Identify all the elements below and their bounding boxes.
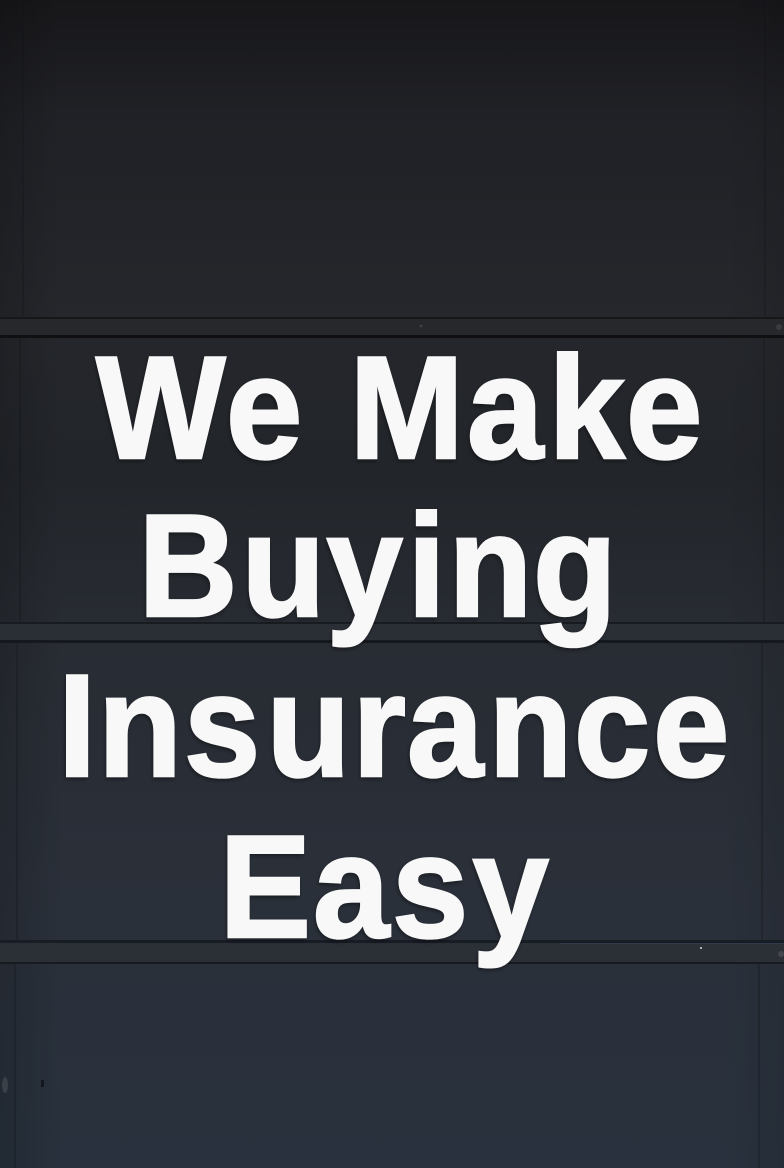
line: Easy: Easy [219, 806, 549, 969]
horizontal batten 1 [0, 317, 784, 338]
line: Insurance: Insurance [58, 645, 729, 808]
headline text [58, 327, 729, 969]
small wall marks [2, 1077, 44, 1093]
horizontal batten 2 [0, 622, 784, 643]
line: Buying: Buying [138, 485, 617, 648]
horizontal batten 3 [0, 940, 784, 964]
line: We Make: We Make [96, 327, 702, 490]
